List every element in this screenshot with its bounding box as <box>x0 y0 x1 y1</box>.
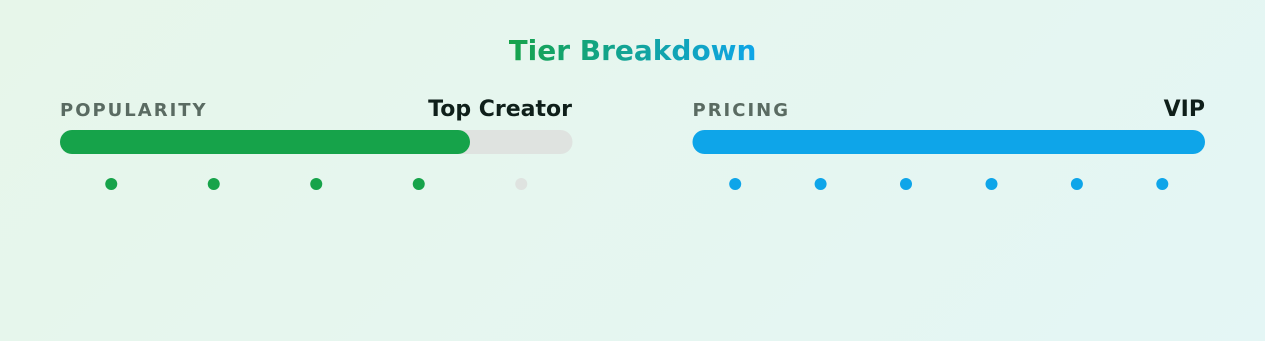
popularity label: POPULARITY <box>60 100 208 121</box>
pricing dots <box>729 178 1168 190</box>
pricing value: VIP <box>1164 97 1205 122</box>
pricing label: PRICING <box>692 100 790 121</box>
pricing bar <box>692 130 1205 154</box>
title: Tier Breakdown <box>508 34 756 67</box>
popularity bar <box>60 130 572 154</box>
popularity value: Top Creator <box>428 97 572 122</box>
popularity dots <box>105 178 527 190</box>
